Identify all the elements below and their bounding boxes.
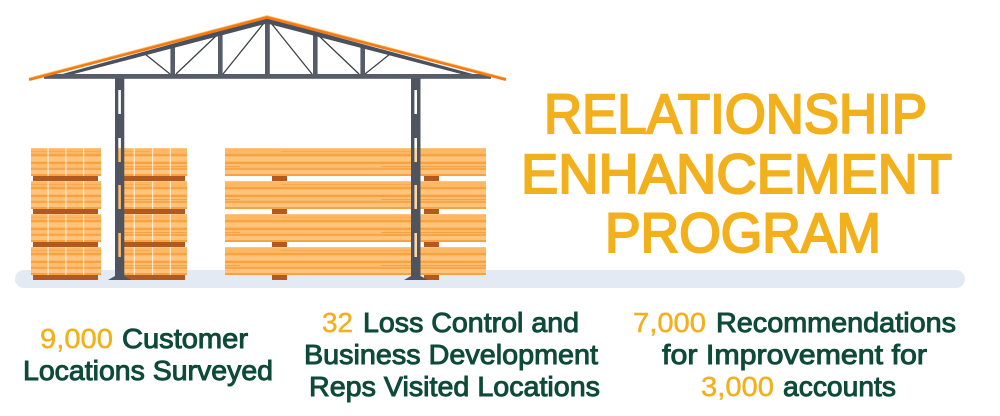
title xyxy=(521,82,952,264)
right column xyxy=(404,78,428,280)
stat: recommendations for improvement: 7,000 xyxy=(633,307,706,338)
stat: recommendations for improvement xyxy=(633,307,956,402)
stat: customer locations surveyed xyxy=(23,323,273,386)
lumber stack: left pallets xyxy=(31,148,101,280)
stat: reps visited locations: Business Development xyxy=(304,339,598,370)
stat: reps visited locations xyxy=(304,307,600,402)
stat: recommendations for improvement: for Improvement for xyxy=(662,339,927,370)
stat: reps visited locations: Reps Visited Locations xyxy=(309,371,600,402)
stat: recommendations for improvement: Recommendations xyxy=(716,307,956,338)
stat: recommendations for improvement: accounts xyxy=(783,371,896,402)
left column xyxy=(108,78,131,280)
ground strip xyxy=(15,270,965,288)
warehouse structure xyxy=(29,16,506,280)
roof truss xyxy=(44,18,491,79)
title: ENHANCEMENT xyxy=(521,142,952,205)
stat: customer locations surveyed: Locations Surveyed xyxy=(23,355,273,386)
lumber stack: long boards xyxy=(225,148,486,280)
title: PROGRAM xyxy=(605,201,881,264)
stat: recommendations for improvement: 3,000 xyxy=(701,371,774,402)
stat: reps visited locations: Loss Control and xyxy=(363,307,579,338)
title: RELATIONSHIP xyxy=(544,82,927,145)
stat: customer locations surveyed: 9,000 xyxy=(40,323,113,354)
lumber stack: middle pallets xyxy=(117,148,187,280)
orange roof line xyxy=(29,16,506,80)
stat: customer locations surveyed: Customer xyxy=(122,323,248,354)
stat: reps visited locations: 32 xyxy=(322,307,353,338)
